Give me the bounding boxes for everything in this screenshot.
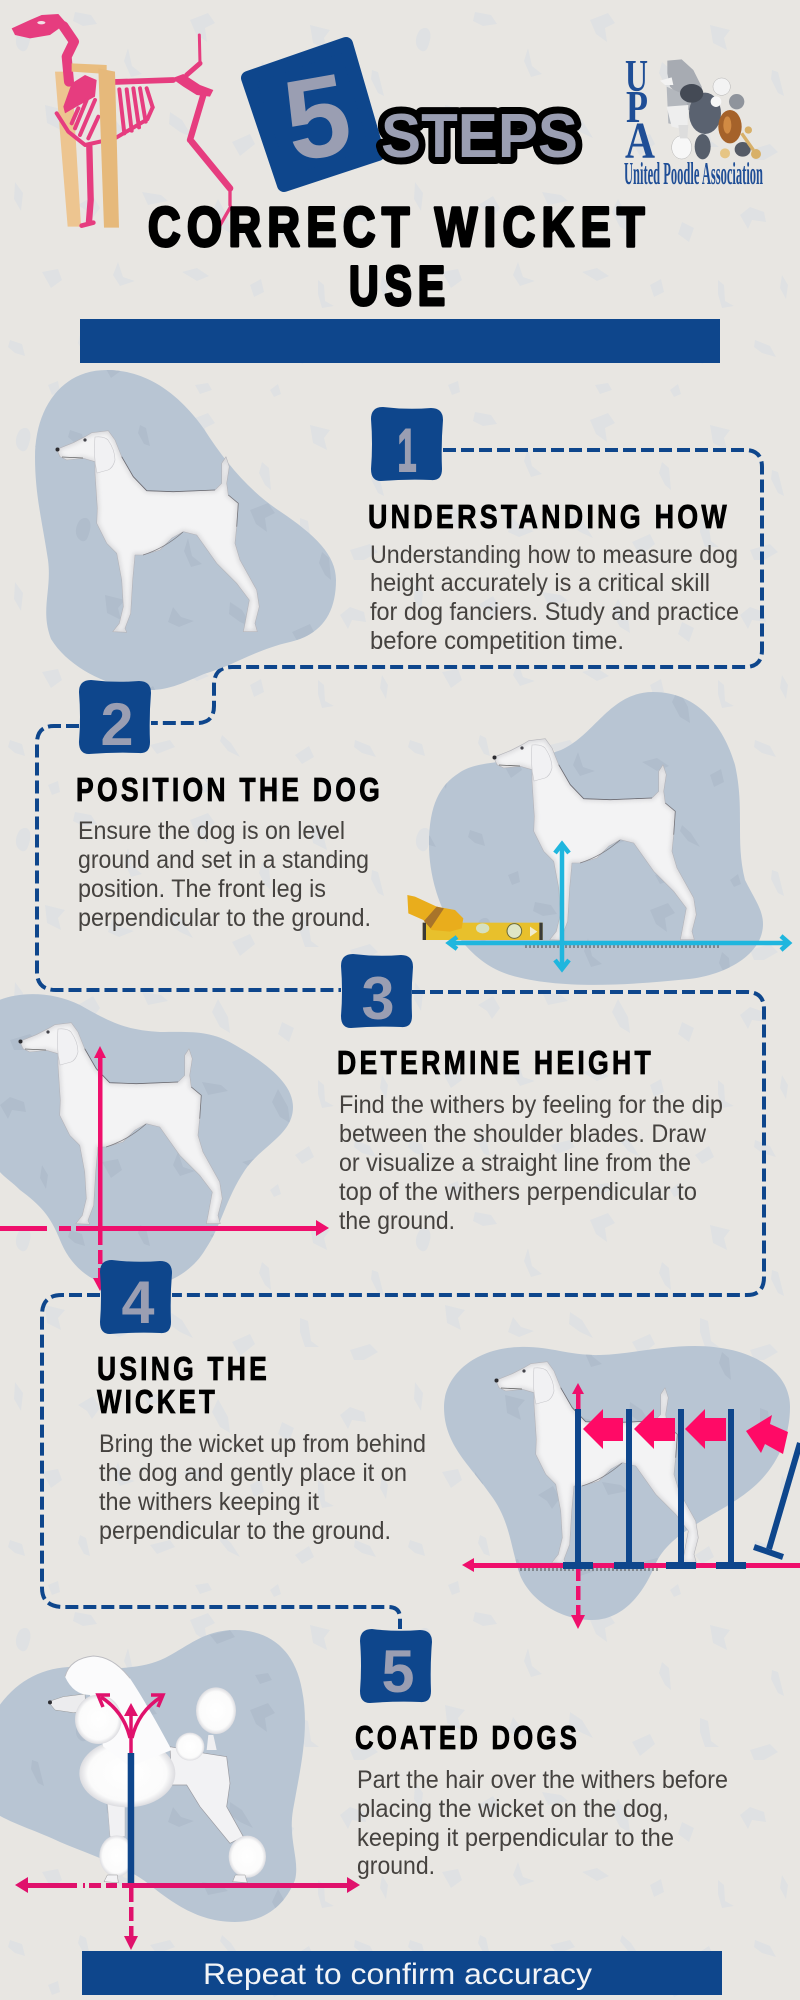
title: USE (349, 254, 451, 317)
step 4 number (100, 1260, 172, 1336)
step 3 text: Find the withers by feeling for the dip (339, 1091, 723, 1119)
step 5 number: 5 (382, 1638, 414, 1705)
panel: step 5 poodle (0, 1630, 360, 1950)
title (148, 195, 651, 317)
logo: United Poodle Association: U (625, 50, 648, 101)
step 1 text: before competition time. (370, 627, 624, 655)
step 3 number: 3 (362, 965, 394, 1032)
connector: step 2 to 3 (37, 726, 341, 990)
panel: step 1 dog (35, 370, 336, 690)
step 1 heading: UNDERSTANDING HOW (368, 498, 730, 535)
step 2 text: perpendicular to the ground. (78, 904, 371, 932)
step 4 heading: WICKET (97, 1383, 218, 1420)
illustration: pink dog skeleton with wicket (12, 14, 231, 228)
step 4 text: the withers keeping it (99, 1488, 319, 1516)
heading: STEPS: STEPS (381, 102, 578, 171)
logo: United Poodle Association: A (625, 113, 655, 170)
step 3 text: the ground. (339, 1207, 455, 1235)
step 2 number: 2 (100, 691, 134, 758)
arrows: pink parting arrows and guides (15, 1695, 360, 1950)
step 5 text: Part the hair over the withers before (357, 1766, 728, 1794)
banner bar (80, 319, 720, 363)
logo: United Poodle Association: P (626, 81, 648, 132)
step 2 text: position. The front leg is (78, 875, 326, 903)
step 4 text: the dog and gently place it on (99, 1459, 407, 1487)
title: CORRECT WICKET (148, 195, 651, 258)
badge: number 5: 5 (275, 49, 360, 187)
step 3 text: or visualize a straight line from the (339, 1149, 691, 1177)
step 5 text: keeping it perpendicular to the (357, 1824, 674, 1852)
step 1 text: height accurately is a critical skill (370, 569, 710, 597)
footer bar (82, 1951, 722, 1995)
step 5 text: placing the wicket on the dog, (357, 1795, 669, 1823)
arrows: pink withers lines (0, 1046, 329, 1291)
step 3 heading: DETERMINE HEIGHT (337, 1044, 654, 1081)
step 5 text (357, 1766, 728, 1880)
step 4 text: perpendicular to the ground. (99, 1517, 391, 1545)
step 2 text (78, 817, 371, 932)
step 3 number (341, 954, 413, 1032)
step 4 number: 4 (122, 1269, 155, 1336)
footer bar: Repeat to confirm accuracy (203, 1958, 592, 1991)
step 2 heading: POSITION THE DOG (76, 771, 383, 808)
badge: number 5 (248, 44, 378, 187)
step 5 number (360, 1629, 432, 1705)
illustration: poodle (48, 1656, 266, 1883)
step 2 text: ground and set in a standing (78, 846, 369, 874)
step 5 text: ground. (357, 1852, 435, 1880)
step 4 text (99, 1430, 426, 1545)
arrows: pink movement arrows (583, 1409, 788, 1454)
step 1 number: 1 (398, 417, 416, 484)
wicket positions (563, 1409, 800, 1569)
panel: step 3 dog with pink guides (0, 994, 329, 1291)
connector: step 4 to 5 (42, 1295, 400, 1629)
logo: United Poodle Association (624, 50, 763, 191)
connector: step 1 to 2 (151, 450, 762, 723)
step 3 text (339, 1091, 723, 1235)
step 3 text: between the shoulder blades. Draw (339, 1120, 707, 1148)
step 2 number (79, 680, 151, 758)
panel: step 2 dog with level (407, 692, 789, 985)
step 1 number (371, 407, 443, 484)
panel: step 4 dog with wickets (444, 1346, 800, 1629)
step 1 text (370, 541, 739, 655)
arrows: cyan horizontal and vertical (449, 844, 789, 969)
arrows: pink ground and height lines (462, 1383, 800, 1629)
step 3 text: top of the withers perpendicular to (339, 1178, 697, 1206)
step 4 text: Bring the wicket up from behind (99, 1430, 426, 1458)
step 1 text: Understanding how to measure dog (370, 541, 738, 569)
step 4 heading: USING THE (97, 1350, 270, 1387)
step 2 text: Ensure the dog is on level (78, 817, 345, 845)
step 5 heading: COATED DOGS (355, 1719, 580, 1756)
step 4 heading (97, 1350, 270, 1420)
icon: spirit level and glove (407, 895, 543, 940)
step 1 text: for dog fanciers. Study and practice (370, 598, 739, 626)
connector: step 3 to 4 (172, 992, 764, 1295)
